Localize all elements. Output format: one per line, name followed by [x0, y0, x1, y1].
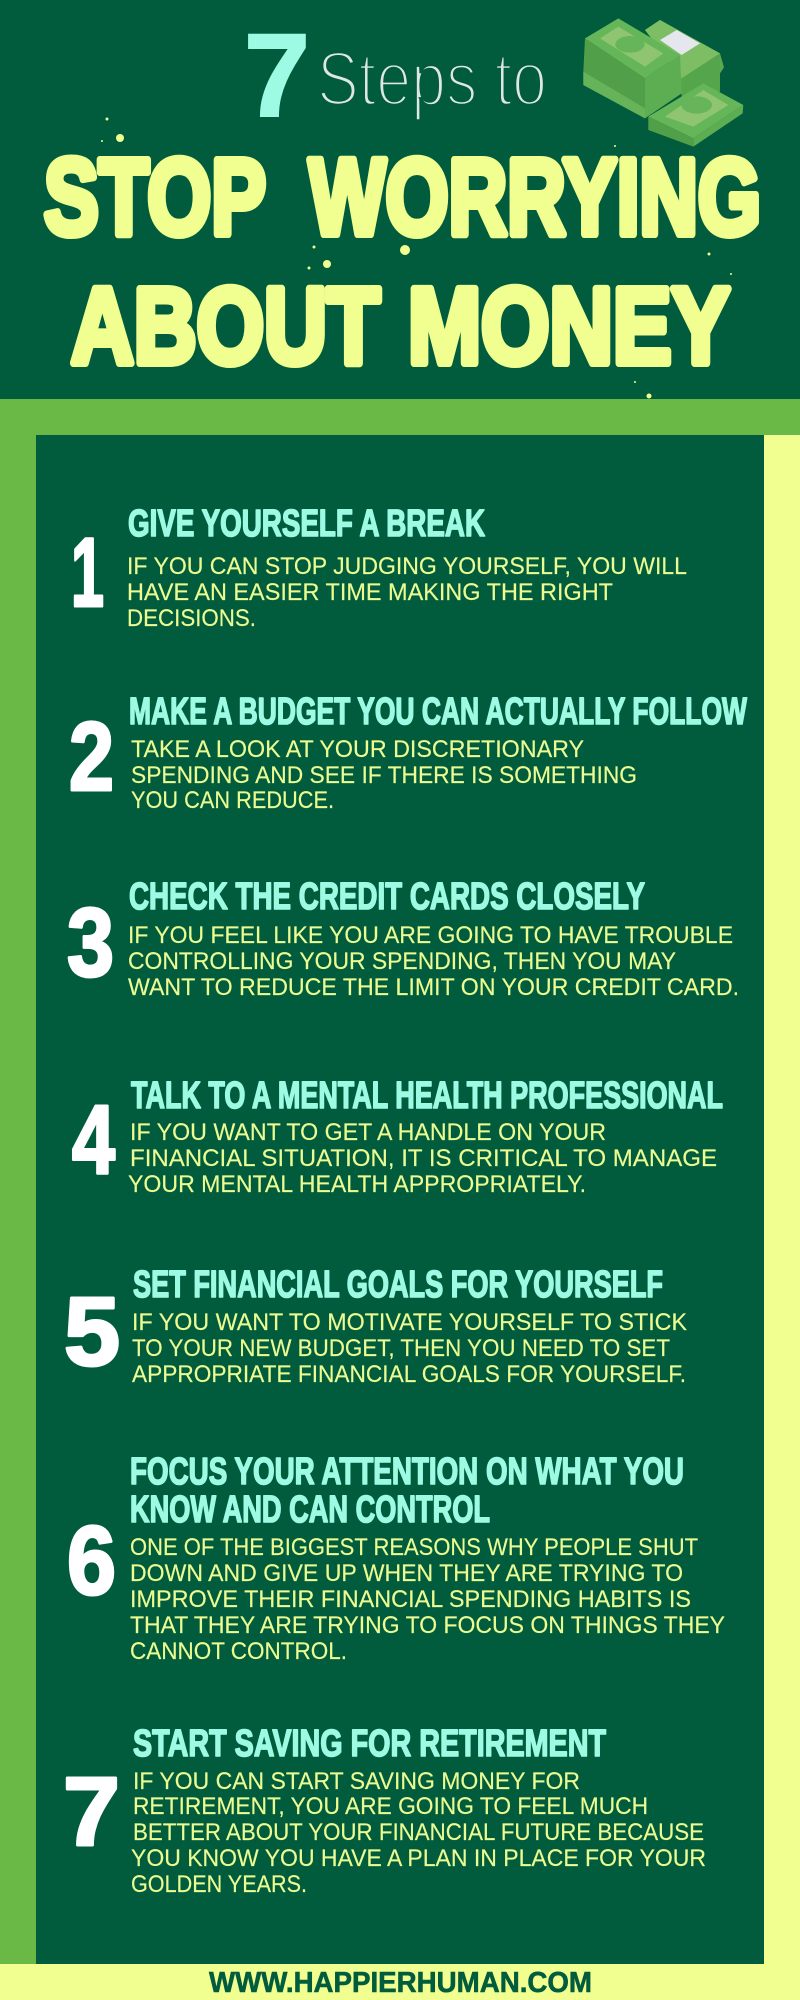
- body 6: DOWN AND GIVE UP WHEN THEY ARE TRYING TO: [130, 1560, 683, 1587]
- body 7: YOU KNOW YOU HAVE A PLAN IN PLACE FOR YOUR: [131, 1845, 706, 1872]
- body 3: WANT TO REDUCE THE LIMIT ON YOUR CREDIT CARD.: [128, 974, 739, 1001]
- header background: [0, 0, 800, 399]
- body 7: RETIREMENT, YOU ARE GOING TO FEEL MUCH: [133, 1793, 648, 1820]
- body 5: APPROPRIATE FINANCIAL GOALS FOR YOURSELF.: [132, 1361, 686, 1388]
- title: About Money: ABOUT: [71, 265, 380, 386]
- step 4: [72, 1075, 723, 1198]
- title: 7 Steps to: Steps to: [317, 37, 547, 122]
- number 3: 3: [67, 888, 114, 997]
- paint splatter dots: [101, 118, 732, 398]
- step 6: [67, 1451, 725, 1665]
- body 3: IF YOU FEEL LIKE YOU ARE GOING TO HAVE TROUBLE: [128, 922, 733, 949]
- body 1: IF YOU CAN STOP JUDGING YOURSELF, YOU WILL: [127, 553, 687, 580]
- body 4: FINANCIAL SITUATION, IT IS CRITICAL TO MANAGE: [130, 1145, 717, 1172]
- number 2: 2: [69, 702, 114, 811]
- number 6: 6: [67, 1506, 116, 1615]
- step 3: [67, 876, 739, 1001]
- body 4: IF YOU WANT TO GET A HANDLE ON YOUR: [130, 1119, 606, 1146]
- heading 1: GIVE YOURSELF A BREAK: [128, 503, 485, 545]
- body 6: [130, 1534, 725, 1665]
- body 5: TO YOUR NEW BUDGET, THEN YOU NEED TO SET: [132, 1335, 670, 1362]
- step 1: [71, 503, 687, 632]
- main dark panel: [36, 435, 764, 1964]
- body 1: [127, 553, 687, 632]
- step 5: [64, 1264, 687, 1388]
- body 5: [132, 1309, 687, 1388]
- number 5: 5: [64, 1277, 120, 1386]
- heading 6: [130, 1451, 684, 1531]
- body 7: [131, 1768, 706, 1898]
- title: Stop Worrying: STOP: [44, 136, 266, 257]
- title: 7 Steps to: 7: [244, 10, 310, 142]
- body 6: ONE OF THE BIGGEST REASONS WHY PEOPLE SHUT: [130, 1534, 698, 1561]
- body 2: [131, 736, 637, 814]
- body 7: GOLDEN YEARS.: [131, 1871, 307, 1898]
- bottom yellow strip: [0, 1964, 800, 2000]
- number 7: 7: [63, 1757, 120, 1866]
- number 4: 4: [72, 1085, 115, 1194]
- body 1: DECISIONS.: [127, 605, 256, 632]
- title: About Money: [71, 265, 730, 386]
- step 2: [69, 691, 747, 814]
- body 6: IMPROVE THEIR FINANCIAL SPENDING HABITS IS: [130, 1586, 691, 1613]
- body 3: CONTROLLING YOUR SPENDING, THEN YOU MAY: [128, 948, 676, 975]
- title: 7 Steps to: [244, 10, 547, 142]
- title: About Money: MONEY: [408, 265, 730, 386]
- body 2: YOU CAN REDUCE.: [131, 787, 334, 814]
- body 2: TAKE A LOOK AT YOUR DISCRETIONARY: [131, 736, 584, 763]
- body 3: [128, 922, 739, 1001]
- body 7: BETTER ABOUT YOUR FINANCIAL FUTURE BECAUSE: [133, 1819, 704, 1846]
- number 1: 1: [71, 518, 104, 627]
- step 7: [63, 1723, 706, 1898]
- heading 7: START SAVING FOR RETIREMENT: [133, 1723, 606, 1765]
- title: Stop Worrying: [44, 136, 761, 257]
- body 5: IF YOU WANT TO MOTIVATE YOURSELF TO STICK: [132, 1309, 687, 1336]
- body 6: CANNOT CONTROL.: [130, 1638, 347, 1665]
- body 4: [128, 1119, 717, 1198]
- body 2: SPENDING AND SEE IF THERE IS SOMETHING: [131, 762, 637, 789]
- right yellow strip: [764, 435, 800, 2000]
- body 7: IF YOU CAN START SAVING MONEY FOR: [133, 1768, 580, 1795]
- left green strip: [0, 435, 36, 1964]
- heading 6: KNOW AND CAN CONTROL: [130, 1489, 490, 1531]
- body 6: THAT THEY ARE TRYING TO FOCUS ON THINGS THEY: [130, 1612, 725, 1639]
- body 4: YOUR MENTAL HEALTH APPROPRIATELY.: [128, 1171, 586, 1198]
- body 1: HAVE AN EASIER TIME MAKING THE RIGHT: [127, 579, 613, 606]
- icon: stacks of money: [583, 18, 743, 147]
- top green band: [0, 399, 800, 435]
- footer website url: WWW.HAPPIERHUMAN.COM: [209, 1967, 592, 1999]
